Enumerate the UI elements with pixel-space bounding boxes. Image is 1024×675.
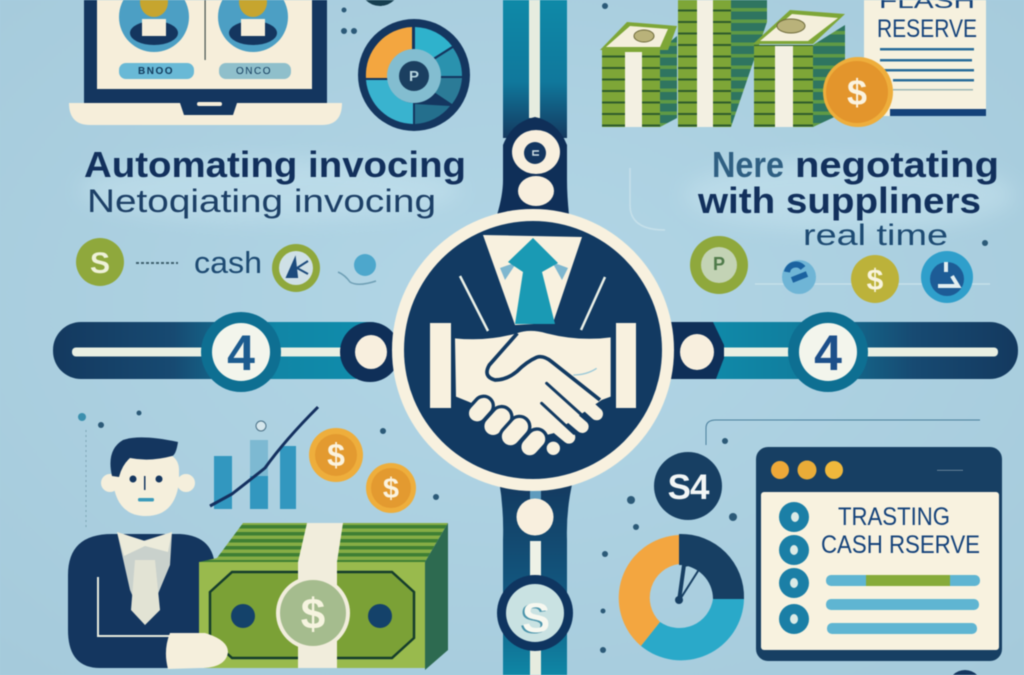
- donut chart top: P: [409, 68, 419, 85]
- browser window: trasting cash reserve: [756, 447, 1002, 661]
- suit body: [68, 534, 215, 668]
- right name pill: ONCO: [236, 66, 272, 77]
- icon: orange coin one: [309, 428, 363, 482]
- icon: green chart badge: [272, 244, 320, 292]
- progress bars: [826, 575, 980, 634]
- label: real time: real time: [803, 219, 948, 252]
- right avatar: [218, 0, 288, 52]
- icon: blue swirl: [782, 260, 816, 294]
- front bill: [199, 562, 425, 668]
- heading: nere negotating: Nere: [712, 144, 784, 185]
- badge: S4: [654, 452, 722, 520]
- shirt and tie: [460, 235, 605, 331]
- shirt and bow tie: [117, 532, 172, 625]
- donut chart top: [358, 19, 470, 131]
- icon: green dollar badge left: S: [90, 247, 110, 280]
- document title: [877, 0, 977, 43]
- partial circles at image edges: [360, 0, 982, 675]
- banknote bundle: [199, 523, 448, 670]
- heading: nere negotating: negotating: [795, 144, 999, 185]
- number badge 4 left: [201, 312, 281, 392]
- icon: green badge right: [690, 236, 748, 294]
- icon: small blue badge: [338, 254, 376, 284]
- bundle side: [425, 523, 448, 670]
- timeline bar left: [53, 312, 400, 392]
- businessman hand on bundle: [166, 633, 228, 669]
- list bullets: [779, 502, 809, 634]
- document title: RESERVE: [877, 15, 977, 43]
- badge: S4: S4: [668, 468, 710, 507]
- icon: yellow dollar badge: [851, 255, 899, 303]
- icon: orange coin one: $: [327, 437, 345, 473]
- vertical connector bottom: [497, 480, 573, 675]
- left stack: [600, 22, 677, 127]
- label: cash: cash: [194, 245, 262, 280]
- head: [101, 437, 195, 516]
- bar chart with trend line: [210, 407, 318, 509]
- window heading: CASH RSERVE: [821, 531, 980, 559]
- band seal: [276, 576, 350, 650]
- icon: green dollar badge left: [76, 238, 124, 286]
- donut chart bottom: [619, 534, 744, 660]
- heading: with suppliners: with suppliners: [697, 180, 981, 221]
- heading: nere negotating: [712, 144, 999, 185]
- band seal: $: [301, 590, 325, 639]
- icon: blue person badge: [921, 251, 973, 303]
- right name pill: [219, 63, 291, 79]
- left avatar: [119, 0, 189, 52]
- right stack: [753, 10, 845, 127]
- icon: orange coin two: [366, 463, 416, 513]
- dollar badge bottom: S: [520, 595, 548, 642]
- dotted separator left: [136, 262, 178, 264]
- cash stacks: [600, 0, 845, 127]
- heading: automating invocing: Automating invocing: [84, 144, 466, 185]
- paper band: [298, 523, 343, 668]
- icon: orange coin two: $: [383, 473, 399, 505]
- icon: orange dollar coin top: [823, 57, 893, 127]
- glow behind right heading: [685, 159, 1015, 231]
- window control dots: [771, 460, 843, 480]
- icon: yellow dollar badge: $: [867, 264, 884, 297]
- middle stack: [678, 0, 767, 127]
- number badge 4 right: 4: [814, 325, 842, 381]
- faint bracket decoration: [630, 168, 665, 230]
- icon: green badge right: P: [713, 254, 725, 274]
- handshake: [455, 331, 611, 461]
- vertical connector top: [497, 0, 569, 215]
- subheading: netoqiating invocing: Netoqiating invocing: [87, 183, 436, 219]
- window toolbar label: -------------: [937, 468, 963, 474]
- businessman figure: [68, 437, 215, 668]
- connector line right icons: [755, 283, 990, 285]
- document: flash reserve: [864, 0, 986, 116]
- dollar badge bottom: S: [522, 594, 550, 641]
- left name pill: [119, 63, 194, 79]
- icon: orange dollar coin top: $: [847, 72, 867, 113]
- window heading: TRASTING: [838, 503, 950, 531]
- window heading: [821, 503, 980, 559]
- bundle top: [199, 523, 448, 562]
- timeline bar right: [660, 312, 1018, 392]
- shirt cuffs: [430, 323, 636, 408]
- glow behind left heading: [80, 160, 460, 220]
- laptop with video call avatars: [69, 0, 342, 125]
- central handshake emblem: [392, 209, 674, 491]
- number badge 4 left: 4: [227, 325, 255, 381]
- number badge 4 right: [788, 312, 868, 392]
- dollar badge bottom: [497, 575, 573, 651]
- left name pill: BNOO: [138, 66, 174, 77]
